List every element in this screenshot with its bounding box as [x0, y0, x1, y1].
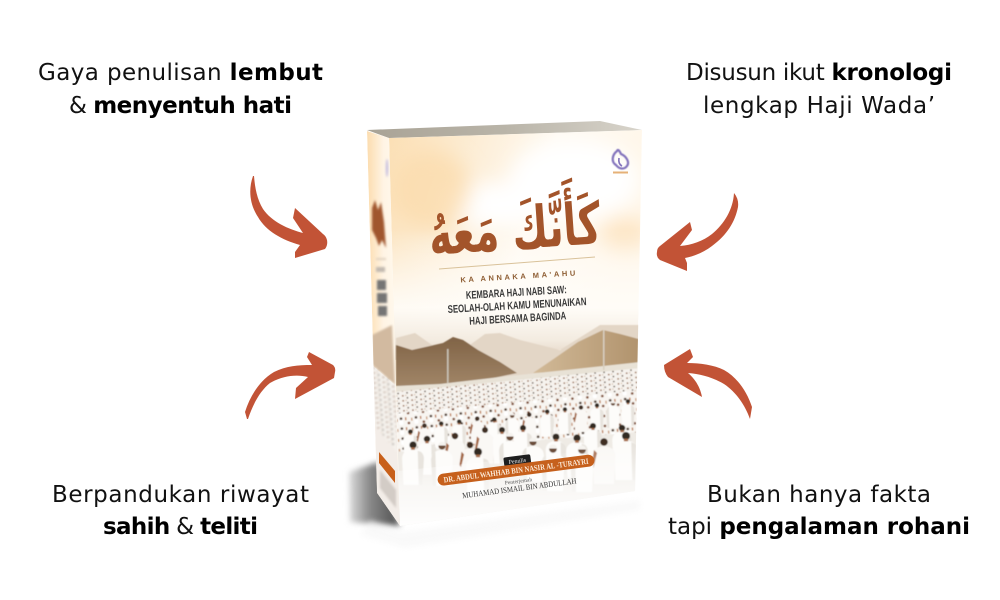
book top edge — [367, 121, 642, 138]
transliterated title: KA ANNAKA MA'AHU — [460, 269, 576, 285]
sky background — [389, 130, 642, 395]
crowd — [396, 368, 638, 506]
publisher logo — [613, 150, 628, 174]
subtitle: HAJI BERSAMA BAGINDA — [469, 310, 567, 328]
arrow: top-right pointing to book — [657, 193, 738, 271]
author name pill — [437, 454, 595, 486]
text: bottom-right feature second line: tapi pengalaman rohani — [668, 514, 970, 540]
Arabic title calligraphy: كَأَنَّكَ مَعَهُ — [426, 176, 603, 269]
author name: DR. ABDUL WAHHAB BIN NASIR AL -TURAYRI — [443, 457, 589, 484]
text: bottom-right feature: Bukan hanya fakta — [707, 482, 931, 508]
subtitle — [447, 283, 588, 329]
book spine — [367, 131, 400, 526]
author credits — [436, 446, 597, 503]
title rule — [439, 257, 595, 269]
text: top-right feature second line: lengkap Haji Wada’ — [703, 93, 935, 119]
subtitle: KEMBARA HAJI NABI SAW: — [466, 284, 567, 302]
book shadow on ground — [349, 462, 640, 548]
spine orange band — [379, 452, 395, 483]
book front cover — [389, 130, 650, 530]
book mockup — [349, 121, 650, 548]
mountains — [396, 325, 642, 396]
arrow: bottom-left pointing to book — [245, 352, 335, 419]
spine scenery — [372, 325, 395, 385]
haze over horizon — [392, 242, 640, 360]
arrow: top-left pointing to book — [250, 176, 327, 258]
text: top-right feature: Disusun ikut kronologi — [686, 60, 952, 86]
clouds — [390, 140, 650, 253]
text: top-left feature: Gaya penulisan lembut — [38, 60, 323, 86]
text: top-left feature second line: & menyentuh hati — [69, 93, 292, 119]
translator label: Penterjemah — [505, 477, 533, 487]
spine text blocks — [376, 267, 387, 316]
translator name: MUHAMAD ISMAIL BIN ABDULLAH — [462, 476, 577, 500]
subtitle: SEOLAH-OLAH KAMU MENUNAIKAN — [447, 296, 587, 316]
bottom fade — [398, 451, 636, 526]
author label pill — [503, 454, 531, 467]
spine calligraphy — [372, 159, 388, 260]
arrow: bottom-right pointing to book — [664, 349, 752, 419]
text: bottom-left feature: Berpandukan riwayat — [52, 482, 309, 508]
crowd figures — [402, 399, 638, 496]
author label: Penulis — [508, 458, 527, 466]
text: bottom-left feature second line: sahih & teliti — [103, 514, 258, 540]
